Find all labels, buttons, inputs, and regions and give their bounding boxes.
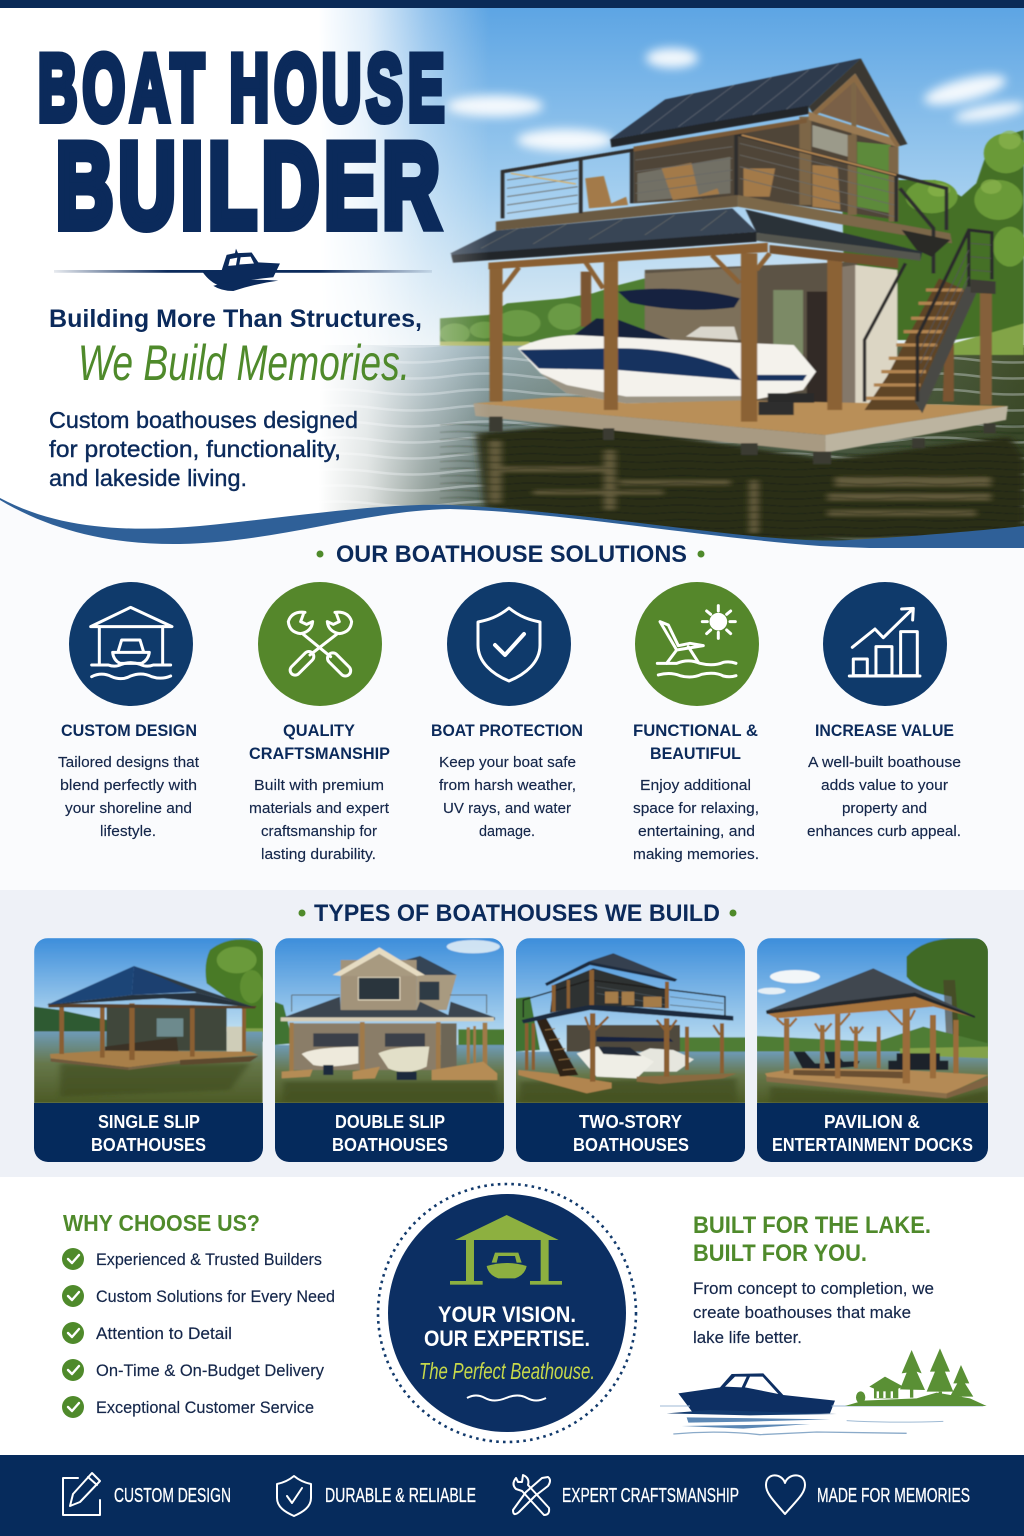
card: single slip boathouses [34, 938, 263, 1162]
card text [249, 777, 390, 863]
card title [249, 721, 390, 763]
label bar [757, 1103, 988, 1162]
white fade [0, 0, 490, 548]
label text [574, 1115, 688, 1151]
back post [581, 272, 591, 327]
upper deck fascia [496, 195, 738, 231]
front posts [490, 253, 842, 422]
title: BUILDER [56, 118, 445, 253]
script line: The Perfect Beathouse. [419, 1358, 595, 1384]
card text: space for relaxing, [633, 800, 759, 817]
card title: INCREASE VALUE [815, 721, 954, 740]
card text: Built with premium [254, 777, 384, 794]
intro text [49, 407, 358, 491]
card text [58, 754, 200, 840]
card text [633, 777, 759, 863]
label bar [516, 1103, 745, 1162]
icon: green boathouse [450, 1215, 562, 1285]
checklist: Attention to Detail [96, 1325, 232, 1343]
badge text: OUR EXPERTISE. [424, 1326, 590, 1351]
photo: pavilion [757, 938, 988, 1103]
card text: A well-built boathouse [808, 754, 961, 771]
tagline: Building More Than Structures, [49, 305, 422, 333]
checklist: On-Time & On-Budget Delivery [96, 1362, 325, 1380]
card text: lifestyle. [100, 823, 156, 840]
badge text [424, 1302, 590, 1351]
card text: Tailored designs that [58, 754, 200, 771]
title [38, 36, 450, 253]
card title: FUNCTIONAL & [633, 721, 758, 740]
upper floor interior [634, 120, 898, 220]
card text: your shoreline and [65, 800, 192, 817]
card text: craftsmanship for [261, 823, 377, 840]
card title: CUSTOM DESIGN [61, 721, 197, 740]
checklist: Exceptional Customer Service [96, 1399, 314, 1417]
card title: BOAT PROTECTION [431, 721, 583, 740]
card title [633, 721, 758, 763]
card text: entertaining, and [638, 823, 755, 840]
heading: types of boathouses: TYPES OF BOATHOUSES WE BUILD [314, 900, 720, 927]
icon: shield [447, 582, 571, 706]
icon: rising chart [823, 582, 947, 706]
upper roof [610, 58, 861, 139]
label text [92, 1115, 206, 1151]
footer item: expert craftsmanship [513, 1475, 739, 1515]
card text: materials and expert [249, 800, 390, 817]
label text: BOATHOUSES [91, 1135, 206, 1155]
label text [773, 1115, 972, 1151]
card title: BEAUTIFUL [650, 744, 741, 763]
label bar [275, 1103, 504, 1162]
intro text: and lakeside living. [49, 465, 247, 491]
footer item: durable and reliable: DURABLE & RELIABLE [325, 1485, 476, 1507]
chairs [585, 163, 840, 210]
card: pavilion and entertainment docks [757, 938, 988, 1162]
card: increase value [807, 582, 961, 840]
intro text: Custom boathouses designed [49, 407, 358, 433]
intro text: for protection, functionality, [49, 436, 341, 462]
text: lake life better. [693, 1329, 802, 1347]
card text: from harsh weather, [439, 777, 576, 794]
label text [333, 1115, 448, 1151]
reflection [475, 423, 1024, 540]
card title: QUALITY [283, 721, 356, 740]
card: functional and beautiful [633, 582, 759, 863]
right trees [842, 130, 1024, 340]
heading: WHY CHOOSE US? [63, 1210, 260, 1236]
icon: boathouse [69, 582, 193, 706]
card text: Enjoy additional [640, 777, 751, 794]
footer item: custom design [63, 1473, 231, 1515]
checklist: Experienced & Trusted Builders [96, 1251, 322, 1269]
heading: our boathouse solutions: OUR BOATHOUSE SOLUTIONS [336, 541, 687, 568]
label text: TWO-STORY [579, 1112, 682, 1132]
footer item: custom design: CUSTOM DESIGN [114, 1485, 231, 1507]
panel: why choose us [62, 1210, 335, 1418]
railings [503, 133, 946, 273]
top bar [0, 0, 1024, 8]
card: quality craftsmanship [249, 582, 390, 863]
label text: BOATHOUSES [332, 1135, 448, 1155]
card text: Keep your boat safe [439, 754, 576, 771]
card text [439, 754, 576, 840]
heading: BUILT FOR THE LAKE. [693, 1212, 931, 1239]
card: custom design [58, 582, 200, 840]
card text [807, 754, 961, 840]
label bar [34, 1103, 263, 1162]
panel: built for the lake [660, 1212, 987, 1435]
stairs [942, 342, 955, 402]
section background: solutions [0, 548, 1024, 890]
card: boat protection [431, 582, 583, 840]
footer item: durable and reliable [277, 1476, 476, 1516]
card text: damage. [479, 823, 535, 840]
wave divider [0, 498, 1024, 600]
far trees [440, 278, 649, 343]
boat [618, 289, 740, 310]
label text: SINGLE SLIP [98, 1112, 200, 1132]
label text: DOUBLE SLIP [335, 1112, 445, 1132]
photo: double slip [274, 938, 505, 1103]
text: create boathouses that make [693, 1304, 911, 1322]
card text: blend perfectly with [60, 777, 197, 794]
card text: making memories. [633, 846, 759, 863]
icon: lounge chair and sun [635, 582, 759, 706]
card text: adds value to your [821, 777, 948, 794]
label text: BOATHOUSES [573, 1135, 689, 1155]
card: two-story boathouses [515, 938, 746, 1162]
card text: lasting durability. [261, 846, 376, 863]
wave line [467, 1396, 546, 1400]
badge: your vision our expertise [378, 1184, 636, 1442]
card text: UV rays, and water [443, 800, 571, 817]
badge text: YOUR VISION. [438, 1302, 576, 1327]
hero photo: boathouse on the lake [206, 8, 1024, 540]
title: BOAT HOUSE [38, 36, 450, 141]
footer item: expert craftsmanship: EXPERT CRAFTSMANSHIP [562, 1485, 739, 1507]
section background: types [0, 890, 1024, 1177]
tagline: We Build Memories. [78, 335, 410, 391]
card text: property and [842, 800, 927, 817]
illustration: boat and island [660, 1348, 987, 1435]
photo: two-story [515, 938, 746, 1103]
divider with boat icon [54, 249, 432, 291]
card text: enhances curb appeal. [807, 823, 961, 840]
footer item: made for memories [766, 1475, 970, 1514]
lower roof [902, 230, 950, 257]
checklist [62, 1248, 335, 1418]
card title: CRAFTSMANSHIP [249, 744, 390, 763]
deck [474, 397, 1008, 435]
label text: PAVILION & [824, 1112, 920, 1132]
footer bar [0, 1455, 1024, 1536]
heading [693, 1212, 931, 1267]
rear wall [645, 262, 857, 407]
tagline [49, 305, 422, 391]
text [693, 1280, 934, 1347]
heading: BUILT FOR YOU. [693, 1240, 867, 1267]
icon: tools [258, 582, 382, 706]
card: double slip boathouses [274, 938, 505, 1162]
text: From concept to completion, we [693, 1280, 934, 1298]
photo: single slip [34, 938, 263, 1103]
checklist: Custom Solutions for Every Need [96, 1288, 335, 1306]
label text: ENTERTAINMENT DOCKS [772, 1135, 973, 1155]
